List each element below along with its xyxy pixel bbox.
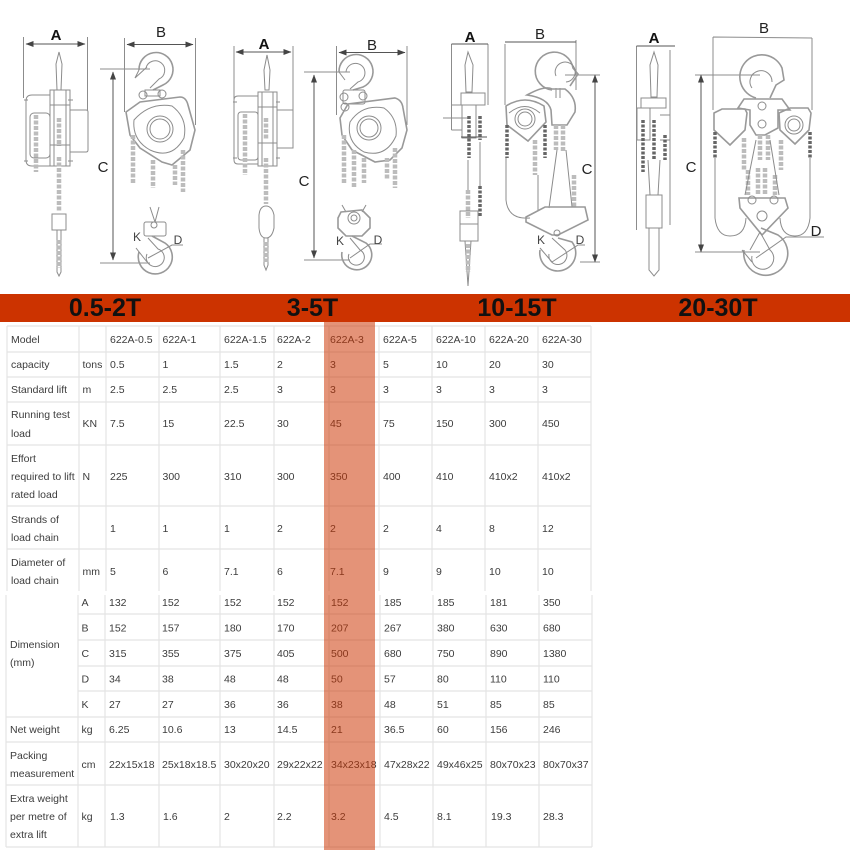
row: strands: 2: [383, 523, 389, 535]
row: effort required: N: [82, 471, 90, 483]
row: extra weight: 2: [224, 811, 230, 823]
row: packing measurement: Packing: [10, 750, 48, 762]
row: dimension D: 48: [224, 674, 236, 686]
row: dimension D: 48: [277, 674, 289, 686]
banner: capacity ranges: [0, 294, 850, 322]
row: running test load: 75: [383, 418, 395, 430]
row: standard lift: 3: [542, 384, 548, 396]
row: running test load: 300: [489, 418, 507, 430]
diagram: 20-30T hoist: [636, 20, 824, 276]
table lower grid lines: [6, 595, 592, 847]
heading: 3-5T: 3-5T: [287, 294, 338, 322]
heading: 0.5-2T: 0.5-2T: [69, 294, 141, 322]
row: dimension A: 152: [224, 597, 242, 609]
heading: 20-30T: 20-30T: [678, 294, 758, 322]
front view 0.5-2T: D: [174, 233, 183, 247]
row: dimension A: 185: [384, 597, 402, 609]
front view 0.5-2T: B: [156, 24, 166, 41]
row: strands: 2: [277, 523, 283, 535]
row: running test load: load: [11, 428, 31, 440]
row: dimension A: A: [82, 597, 89, 609]
side view 3-5T: [233, 36, 293, 270]
row: dimension B: 680: [543, 622, 561, 634]
row: dimension D: 110: [543, 674, 560, 686]
front view 20-30T: D: [811, 223, 822, 240]
row: dimension D: 50: [331, 674, 343, 686]
row: packing measurement: 34x23x18: [331, 759, 377, 771]
row: capacity: tons: [82, 359, 102, 371]
highlight: 622A-3 column: [324, 322, 375, 850]
diagram: 3-5T hoist: [233, 36, 407, 270]
row: standard lift: Standard lift: [11, 384, 67, 396]
row: capacity: 10: [436, 359, 448, 371]
row: net weight: 21: [331, 724, 343, 736]
row: dimension K: K: [82, 699, 89, 711]
row: standard lift: 3: [489, 384, 495, 396]
row: diameter: 6: [277, 566, 283, 578]
row: dimension B: 630: [490, 622, 508, 634]
row: capacity: 30: [542, 359, 554, 371]
row: net weight: Net weight: [10, 724, 60, 736]
row: dimension A: 132: [109, 597, 127, 609]
front view 10-15T: C: [582, 161, 593, 178]
row: capacity: capacity: [11, 359, 50, 371]
row: dimension A: 350: [543, 597, 561, 609]
row: capacity: 0.5: [110, 359, 125, 371]
row: strands: Strands of: [11, 514, 59, 526]
row: model: 622A-2: [277, 334, 311, 346]
row: strands: 1: [224, 523, 230, 535]
row: capacity: 1.5: [224, 359, 239, 371]
side view 0.5-2T: [24, 27, 88, 276]
row: standard lift: 3: [330, 384, 336, 396]
row: dimension C: 680: [384, 648, 402, 660]
row: strands: [11, 514, 554, 544]
specification table: [6, 326, 592, 847]
row: dimension C: 405: [277, 648, 295, 660]
row: extra weight: [10, 793, 564, 841]
row: effort required: 300: [162, 471, 180, 483]
row: model: 622A-1.5: [224, 334, 267, 346]
row: dimension A: 152: [162, 597, 180, 609]
row: diameter: [11, 557, 554, 587]
row: strands: load chain: [11, 532, 59, 544]
row: packing measurement: 47x28x22: [384, 759, 430, 771]
row: standard lift: 3: [383, 384, 389, 396]
front view 3-5T: [299, 37, 407, 270]
row: standard lift: 3: [436, 384, 442, 396]
row: dimension D: 34: [109, 674, 121, 686]
row: dimension B: 267: [384, 622, 402, 634]
row: running test load: Running test: [11, 409, 70, 421]
row: running test load: 7.5: [110, 418, 125, 430]
diagram: 10-15T hoist: [443, 26, 600, 286]
row: dimension D: 110: [490, 674, 507, 686]
row: effort required: 410: [436, 471, 454, 483]
row: dimension B: 170: [277, 622, 295, 634]
row: model: 622A-30: [542, 334, 582, 346]
row: dimension K: 38: [331, 699, 343, 711]
row: strands: 1: [162, 523, 168, 535]
row label: dimension: Dimension: [10, 639, 60, 651]
row: strands: 8: [489, 523, 495, 535]
row: dimension K: 36: [224, 699, 236, 711]
row: net weight: 60: [437, 724, 449, 736]
row: model: 622A-20: [489, 334, 529, 346]
row: packing measurement: measurement: [10, 768, 74, 780]
row: packing measurement: 49x46x25: [437, 759, 483, 771]
front view 0.5-2T: K: [133, 230, 141, 244]
row: packing measurement: 25x18x18.5: [162, 759, 216, 771]
row: dimension D: D: [82, 674, 90, 686]
front view 0.5-2T: [98, 24, 196, 274]
row: running test load: 30: [277, 418, 289, 430]
row: packing measurement: cm: [82, 759, 96, 771]
row: net weight: 10.6: [162, 724, 183, 736]
row: dimension D: 80: [437, 674, 449, 686]
row: dimension A: 185: [437, 597, 455, 609]
row: running test load: [11, 409, 560, 440]
row: extra weight: 8.1: [437, 811, 452, 823]
row: model: 622A-10: [436, 334, 476, 346]
row: extra weight: 2.2: [277, 811, 292, 823]
row: dimension C: 750: [437, 648, 455, 660]
row: model: 622A-3: [330, 334, 364, 346]
row label: dimension: [10, 639, 60, 669]
row: net weight: 156: [490, 724, 508, 736]
front view 3-5T: B: [367, 37, 377, 54]
row: dimension B: 180: [224, 622, 242, 634]
row: standard lift: m: [82, 384, 92, 396]
front view 10-15T: B: [535, 26, 545, 43]
row: dimension A: 152: [331, 597, 349, 609]
row: diameter: 7.1: [330, 566, 345, 578]
row: dimension K: 27: [109, 699, 121, 711]
row: dimension C: 890: [490, 648, 508, 660]
side view 3-5T: A: [259, 36, 270, 53]
row: capacity: 2: [277, 359, 283, 371]
row: diameter: mm: [82, 566, 100, 578]
side view 20-30T: A: [649, 30, 660, 47]
row: running test load: 450: [542, 418, 560, 430]
row: net weight: 246: [543, 724, 561, 736]
row: strands: 12: [542, 523, 554, 535]
row: dimension C: 315: [109, 648, 127, 660]
row: extra weight: per metre of: [10, 811, 67, 823]
side view 0.5-2T: A: [51, 27, 62, 44]
row: effort required: 410x2: [542, 471, 571, 483]
row: model: 622A-5: [383, 334, 417, 346]
front view 0.5-2T: C: [98, 159, 109, 176]
row: extra weight: 3.2: [331, 811, 346, 823]
row: dimension A: 181: [490, 597, 508, 609]
row: dimension K: 85: [490, 699, 502, 711]
row: dimension K: 51: [437, 699, 449, 711]
side view 10-15T: [443, 29, 488, 286]
row: packing measurement: 80x70x37: [543, 759, 589, 771]
heading: 10-15T: 10-15T: [477, 294, 557, 322]
front view 20-30T: B: [759, 20, 769, 37]
row: dimension D: 57: [384, 674, 396, 686]
row: dimension B: 207: [331, 622, 349, 634]
row: dimension K: 27: [162, 699, 174, 711]
row: diameter: Diameter of: [11, 557, 65, 569]
row: diameter: 7.1: [224, 566, 239, 578]
front view 10-15T: [505, 26, 600, 271]
row: dimension A: 152: [277, 597, 295, 609]
row: dimension C: 355: [162, 648, 180, 660]
row: running test load: 22.5: [224, 418, 245, 430]
front view 3-5T: C: [299, 173, 310, 190]
front view 20-30T: C: [686, 159, 697, 176]
row: dimension B: 152: [109, 622, 127, 634]
row: net weight: 14.5: [277, 724, 298, 736]
row: packing measurement: 30x20x20: [224, 759, 270, 771]
row: extra weight: 19.3: [491, 811, 512, 823]
side view 10-15T: A: [465, 29, 476, 46]
row: effort required: 410x2: [489, 471, 518, 483]
row: extra weight: 4.5: [384, 811, 399, 823]
row: capacity: 1: [162, 359, 168, 371]
row: capacity: 20: [489, 359, 501, 371]
row: standard lift: 2.5: [224, 384, 239, 396]
row: diameter: load chain: [11, 575, 59, 587]
row: running test load: 45: [330, 418, 342, 430]
row: effort required: required to lift: [11, 471, 75, 483]
row: extra weight: 28.3: [543, 811, 564, 823]
front view 3-5T: D: [374, 233, 383, 247]
row: standard lift: 2.5: [162, 384, 177, 396]
row: net weight: 36.5: [384, 724, 405, 736]
front view 10-15T: D: [576, 233, 585, 247]
row: model: Model: [11, 334, 40, 346]
row: dimension B: 157: [162, 622, 180, 634]
row: diameter: 6: [162, 566, 168, 578]
row: strands: 2: [330, 523, 336, 535]
row: dimension C: 1380: [543, 648, 567, 660]
side view 20-30T: [636, 30, 675, 276]
row: running test load: KN: [82, 418, 97, 430]
row: dimension K: 48: [384, 699, 396, 711]
row: dimension C: C: [82, 648, 90, 660]
row: extra weight: 1.6: [163, 811, 178, 823]
front view 3-5T: K: [336, 234, 344, 248]
row: strands: 1: [110, 523, 116, 535]
row: dimension K: 85: [543, 699, 555, 711]
diagram: 0.5-2T hoist: [24, 24, 196, 276]
front view 10-15T: K: [537, 233, 545, 247]
row: diameter: 9: [383, 566, 389, 578]
row: dimension K: 36: [277, 699, 289, 711]
row label: dimension: (mm): [10, 657, 34, 669]
row: dimension B: B: [82, 622, 89, 634]
row: effort required: 225: [110, 471, 128, 483]
row: effort required: 310: [224, 471, 242, 483]
row: standard lift: 3: [277, 384, 283, 396]
row: diameter: 10: [489, 566, 501, 578]
table upper grid lines: [7, 326, 591, 591]
row: capacity: 5: [383, 359, 389, 371]
row: extra weight: Extra weight: [10, 793, 68, 805]
row: dimension B: 380: [437, 622, 455, 634]
row: packing measurement: [10, 750, 589, 780]
row: standard lift: 2.5: [110, 384, 125, 396]
row: packing measurement: 80x70x23: [490, 759, 536, 771]
row: packing measurement: 29x22x22: [277, 759, 323, 771]
row: net weight: 13: [224, 724, 236, 736]
row: diameter: 10: [542, 566, 554, 578]
row: net weight: kg: [82, 724, 93, 736]
row: effort required: [11, 453, 571, 501]
row: model: 622A-0.5: [110, 334, 153, 346]
row: packing measurement: 22x15x18: [109, 759, 155, 771]
row: effort required: 400: [383, 471, 401, 483]
row: strands: 4: [436, 523, 442, 535]
row: effort required: Effort: [11, 453, 36, 465]
row: extra weight: extra lift: [10, 829, 47, 841]
row: effort required: rated load: [11, 489, 58, 501]
row: dimension C: 375: [224, 648, 242, 660]
row: extra weight: kg: [82, 811, 93, 823]
row: effort required: 350: [330, 471, 348, 483]
row: capacity: 3: [330, 359, 336, 371]
row: dimension C: 500: [331, 648, 349, 660]
row: diameter: 9: [436, 566, 442, 578]
row: extra weight: 1.3: [110, 811, 125, 823]
row: diameter: 5: [110, 566, 116, 578]
row: effort required: 300: [277, 471, 295, 483]
row: dimension D: 38: [162, 674, 174, 686]
row: model: 622A-1: [162, 334, 197, 346]
front view 20-30T: [686, 20, 824, 275]
row: running test load: 15: [162, 418, 174, 430]
row: net weight: 6.25: [109, 724, 130, 736]
row: running test load: 150: [436, 418, 454, 430]
